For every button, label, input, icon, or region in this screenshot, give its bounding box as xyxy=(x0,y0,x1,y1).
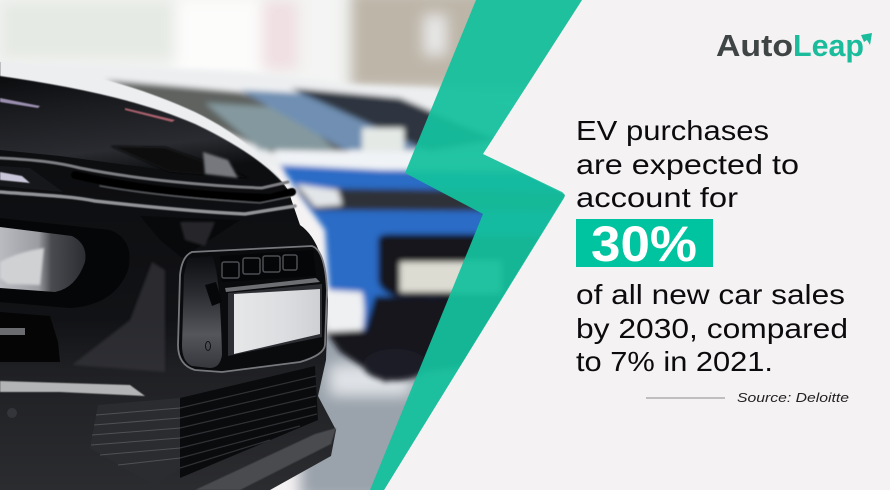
chrome strip xyxy=(0,381,145,396)
hood xyxy=(0,87,250,167)
main statement, lower lines: to 7% in 2021. xyxy=(576,346,773,377)
license plate xyxy=(228,284,322,356)
hood top highlight xyxy=(0,60,288,190)
main statement, upper lines: EV purchases xyxy=(576,115,769,146)
chrome trim lines xyxy=(0,158,295,214)
main statement, lower lines xyxy=(576,279,848,377)
bumper lip xyxy=(195,428,336,490)
main statement, upper lines: are expected to xyxy=(576,149,799,180)
emblem panel xyxy=(182,256,222,368)
lower grille xyxy=(90,366,318,486)
main statement, upper lines: account for xyxy=(576,182,738,213)
logo: AutoLeap: Auto xyxy=(716,28,793,63)
blue car xyxy=(278,162,565,334)
main statement, lower lines: by 2030, compared xyxy=(576,313,848,344)
left small light xyxy=(0,166,63,192)
blurred background cars xyxy=(104,70,565,386)
logo: AutoLeap xyxy=(716,28,872,63)
green lightning bolt xyxy=(370,0,582,490)
grille frame xyxy=(178,246,327,372)
headlight xyxy=(0,218,130,308)
highlight: 30%: 30% xyxy=(591,216,697,272)
source line: Source: Deloitte xyxy=(737,390,849,405)
blurred showroom background xyxy=(0,0,640,490)
main statement, upper lines xyxy=(576,115,799,213)
black car body xyxy=(0,60,336,490)
upper grille xyxy=(221,254,298,279)
car dealership photo xyxy=(0,0,640,490)
logo: AutoLeap: Leap xyxy=(793,28,864,63)
main statement, lower lines: of all new car sales xyxy=(576,279,845,310)
